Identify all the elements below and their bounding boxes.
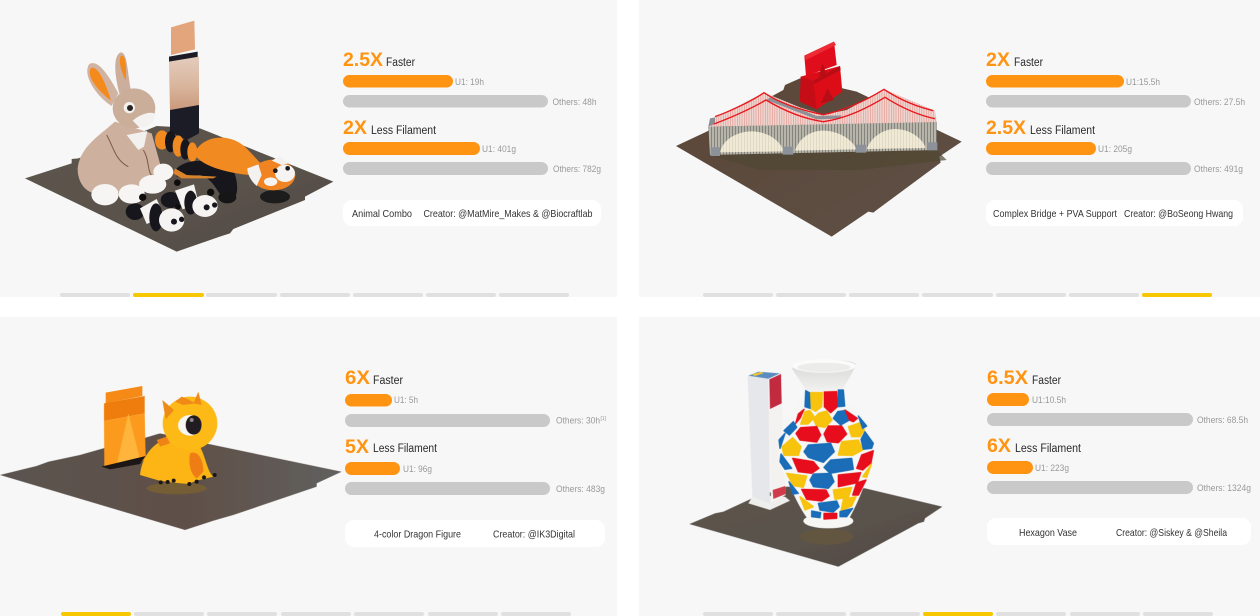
- stat: filament heading: [343, 117, 437, 139]
- stat: speed heading: 2.5X: [343, 49, 383, 71]
- progress indicator: [703, 612, 1213, 616]
- card: model and creator: [343, 200, 601, 226]
- bar: others time: [986, 95, 1245, 108]
- bar: others filament: Others: 483g: [556, 484, 605, 495]
- bar: others time: Others: 30h: [556, 416, 600, 426]
- stat: speed heading: [986, 49, 1043, 71]
- stat: filament heading: 2X: [343, 117, 367, 139]
- card: model and creator: Creator: @IK3Digital: [493, 528, 575, 540]
- bar: U1 filament: U1: 205g: [1098, 144, 1132, 155]
- bar: U1 time: [987, 393, 1066, 406]
- stat: speed heading: Faster: [1032, 375, 1061, 387]
- bar: others filament: [343, 162, 601, 175]
- stat: speed heading: 2X: [986, 49, 1010, 71]
- bar: U1 filament: U1: 223g: [1035, 463, 1069, 474]
- bar: U1 time: [343, 75, 484, 88]
- card: model and creator: Creator: @Siskey & @Sheila: [1116, 527, 1227, 539]
- stat: filament heading: [345, 436, 438, 458]
- bar: others time: [345, 414, 606, 427]
- card: model and creator: 4-color Dragon Figure: [374, 528, 461, 540]
- bar: others filament: Others: 1324g: [1197, 483, 1251, 494]
- panel: Hexagon Vase: [639, 317, 1260, 616]
- stat: speed heading: [343, 49, 415, 71]
- bar: others time: Others: 27.5h: [1194, 97, 1245, 108]
- bar: others time: Others: 48h: [552, 97, 596, 108]
- panel: 4-color Dragon Figure: [0, 317, 617, 616]
- bar: others time: [1]: [600, 416, 606, 422]
- stat: filament heading: [987, 435, 1082, 457]
- bar: others filament: [345, 482, 605, 495]
- image: yellow dragon on build plate: [0, 386, 342, 530]
- stat: filament heading: 2.5X: [986, 117, 1026, 139]
- image: red bridge with support on build plate: [676, 42, 962, 237]
- stat: speed heading: Faster: [373, 375, 403, 387]
- bar: U1 filament: [987, 461, 1069, 474]
- bar: U1 filament: [986, 142, 1132, 155]
- stat: filament heading: Less Filament: [373, 443, 438, 455]
- card: model and creator: Animal Combo: [352, 208, 412, 220]
- progress indicator: [703, 293, 1212, 297]
- image: hexagon vase on build plate: [689, 359, 942, 567]
- bar: U1 filament: U1: 401g: [482, 144, 516, 155]
- bar: U1 time: U1:10.5h: [1032, 395, 1066, 406]
- stat: filament heading: 6X: [987, 435, 1011, 457]
- bar: U1 time: U1: 5h: [394, 395, 418, 406]
- stat: speed heading: 6X: [345, 367, 370, 389]
- bar: U1 time: [345, 394, 418, 406]
- progress indicator: [60, 293, 569, 297]
- bar: U1 filament: [343, 142, 516, 155]
- panel: Animal Combo: [0, 0, 617, 297]
- panel: Complex Bridge: [639, 0, 1260, 297]
- bar: others filament: Others: 782g: [553, 164, 601, 175]
- stat: filament heading: Less Filament: [1015, 443, 1082, 455]
- stat: speed heading: [345, 367, 403, 389]
- card: model and creator: Complex Bridge + PVA Support: [993, 208, 1117, 220]
- bar: U1 time: U1: 19h: [455, 77, 484, 88]
- bar: others filament: [987, 481, 1251, 494]
- card: model and creator: Creator: @MatMire_Makes & @Biocraftlab: [424, 208, 593, 220]
- bar: U1 filament: [345, 462, 432, 475]
- progress indicator: [61, 612, 571, 616]
- bar: U1 time: [986, 75, 1160, 88]
- bar: others filament: [986, 162, 1243, 175]
- stat: filament heading: Less Filament: [371, 125, 437, 137]
- bar: others filament: Others: 491g: [1194, 164, 1243, 175]
- card: model and creator: Hexagon Vase: [1019, 527, 1077, 539]
- stat: filament heading: 5X: [345, 436, 369, 458]
- card: model and creator: [986, 200, 1243, 226]
- bar: others time: [987, 413, 1248, 426]
- stat: filament heading: [986, 117, 1096, 139]
- card: model and creator: [987, 518, 1251, 545]
- stat: speed heading: Faster: [386, 57, 415, 69]
- stat: filament heading: Less Filament: [1030, 125, 1096, 137]
- bar: U1 filament: U1: 96g: [403, 464, 432, 475]
- stat: speed heading: [987, 367, 1061, 389]
- image: animal combo models on build plate: [25, 21, 333, 252]
- bar: U1 time: U1:15.5h: [1126, 77, 1160, 88]
- stat: speed heading: Faster: [1014, 57, 1043, 69]
- bar: others time: Others: 68.5h: [1197, 415, 1248, 426]
- card: model and creator: Creator: @BoSeong Hwang: [1124, 208, 1233, 220]
- bar: others time: [343, 95, 596, 108]
- card: model and creator: [345, 520, 605, 547]
- stat: speed heading: 6.5X: [987, 367, 1028, 389]
